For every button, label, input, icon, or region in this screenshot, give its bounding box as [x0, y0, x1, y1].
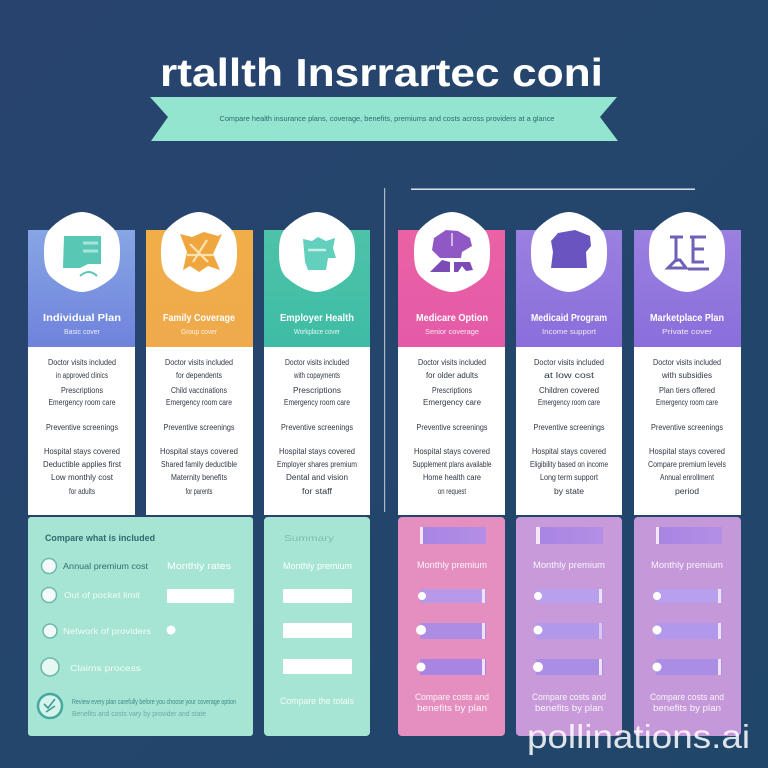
panel: mint comparison narrow [264, 517, 370, 736]
plan 1 details: in approved clinics [56, 371, 108, 380]
plan 5 details: Doctor visits included [534, 358, 604, 367]
plan 4 details: Emergency care [423, 398, 482, 407]
plan 2 details: Doctor visits included [165, 358, 233, 367]
plan 2 details [160, 358, 238, 496]
plan 5 details: Hospital stays covered [532, 447, 606, 456]
plan 1 subheading: Basic cover [64, 327, 100, 336]
panel: plan column 3 [264, 212, 370, 515]
plan 3 details: Prescriptions [293, 386, 341, 395]
plan 3 details: Doctor visits included [285, 358, 349, 367]
plan 6 details: Preventive screenings [651, 423, 723, 432]
row 1 [42, 558, 232, 574]
plan 2 heading: Family Coverage [163, 313, 235, 324]
plan 5 details: by state [554, 487, 585, 496]
plan 5 details: at low cost [544, 371, 595, 380]
plan 5 details: Eligibility based on income [530, 460, 608, 469]
footnote [415, 692, 489, 713]
plan 1 details: Prescriptions [61, 386, 103, 395]
footnote: benefits by plan [653, 703, 721, 713]
plan 4 details: Home health care [423, 473, 481, 482]
plan 4 details [412, 358, 492, 496]
bar 3 [533, 659, 603, 675]
plan 3 heading: Employer Health [280, 313, 354, 324]
plan 1 details: Emergency room care [48, 398, 116, 407]
plan 5 details: Preventive screenings [534, 423, 604, 432]
plan 6 details: Emergency room care [656, 398, 718, 407]
plan 1 heading: Individual Plan [43, 313, 121, 324]
bar 2 [652, 623, 722, 639]
plan 6 details: period [675, 487, 699, 496]
plan 1 details [43, 358, 122, 496]
bar 1 [534, 589, 603, 603]
plan 4 details: on request [438, 487, 467, 496]
plan 4 details: Hospital stays covered [414, 447, 490, 456]
footnote [650, 692, 724, 713]
horizontal rule [411, 188, 695, 190]
plan 6 details: Plan tiers offered [659, 386, 715, 395]
plan 3 subheading: Workplace cover [294, 327, 340, 336]
panel: plan column 5 [516, 212, 622, 515]
plan 1 details: Preventive screenings [46, 423, 118, 432]
bar 2 [416, 623, 486, 639]
plan 1 details: Hospital stays covered [44, 447, 120, 456]
narrow label: Monthly premium [283, 561, 352, 571]
panel: lilac comparison 1 [516, 517, 622, 736]
row 2 [42, 588, 234, 603]
bar 2 [283, 623, 352, 638]
plan 4 details: Prescriptions [432, 386, 472, 395]
icon: plan 2 badge [161, 212, 237, 292]
panel: lilac comparison 2 [634, 517, 741, 736]
plan 6 details: with subsidies [661, 371, 712, 380]
plan 2 details: for dependents [176, 371, 222, 380]
comparison heading: Compare what is included [45, 533, 155, 543]
label: Monthly premium [417, 560, 487, 570]
row 1: Monthly rates [167, 561, 232, 571]
icon: plan 3 badge [279, 212, 355, 292]
plan 4 details: Doctor visits included [418, 358, 486, 367]
plan 4 details: Preventive screenings [416, 423, 488, 432]
plan 1 details: Doctor visits included [48, 358, 116, 367]
icon: plan 5 badge [531, 212, 607, 292]
plan 5 details: Emergency room care [538, 398, 600, 407]
bar 1 [283, 589, 352, 603]
bar 3 [283, 659, 352, 674]
icon: check badge [38, 694, 62, 718]
plan 5 heading: Medicaid Program [531, 313, 607, 324]
plan 2 details: Emergency room care [166, 398, 232, 407]
footnote: Compare costs and [415, 692, 489, 702]
bar 3 [416, 659, 486, 675]
plan 3 details: for staff [302, 487, 333, 496]
plan 3 details: Employer shares premium [277, 460, 357, 469]
plan 6 details: Compare premium levels [648, 460, 726, 469]
plan 4 subheading: Senior coverage [425, 327, 479, 336]
bar 1 [418, 589, 486, 603]
plan 6 heading: Marketplace Plan [650, 313, 724, 324]
footnote [532, 692, 606, 713]
plan 5 details [530, 358, 608, 496]
plan 3 details: Emergency room care [284, 398, 350, 407]
row 3 [43, 624, 176, 638]
icon: plan 6 badge [649, 212, 725, 292]
plan 3 details: Hospital stays covered [279, 447, 355, 456]
plan 2 subheading: Group cover [181, 327, 217, 336]
plan 2 details: Maternity benefits [171, 473, 227, 482]
panel: plan column 4 [398, 212, 505, 515]
plan 3 details [277, 358, 357, 496]
footnote [72, 697, 236, 718]
plan 2 details: for parents [186, 487, 212, 496]
footnote: benefits by plan [417, 703, 487, 713]
top bar [656, 527, 722, 544]
plan 6 details [648, 358, 726, 496]
panel: pink comparison [398, 517, 505, 736]
vertical divider [384, 188, 385, 512]
bar 2 [534, 623, 603, 639]
footnote: Compare costs and [532, 692, 606, 702]
ribbon banner [150, 97, 618, 141]
panel: plan column 1 [28, 212, 135, 515]
plan 6 details: Doctor visits included [653, 358, 721, 367]
label: Monthly premium [651, 560, 723, 570]
plan 5 subheading: Income support [542, 327, 597, 336]
plan 6 subheading: Private cover [662, 327, 713, 336]
plan 2 details: Hospital stays covered [160, 447, 238, 456]
plan 1 details: Low monthly cost [51, 473, 114, 482]
row 4 [41, 658, 141, 676]
watermark: pollinations.ai [527, 718, 750, 755]
plan 1 details: Deductible applies first [43, 460, 122, 469]
plan 6 details: Hospital stays covered [649, 447, 725, 456]
plan 4 details: Supplement plans available [412, 460, 492, 469]
icon: plan 1 badge [44, 212, 120, 292]
bar 3 [652, 659, 722, 675]
plan 2 details: Child vaccinations [171, 386, 227, 395]
title: rtallth Insrrartec coni [160, 52, 603, 95]
panel: plan column 2 [146, 212, 253, 515]
footnote: Benefits and costs vary by provider and state [72, 709, 206, 718]
footnote: Review every plan carefully before you choose your coverage option [72, 697, 236, 706]
plan 3 details: with copayments [293, 371, 340, 380]
narrow footnote: Compare the totals [280, 696, 354, 706]
footnote: benefits by plan [535, 703, 603, 713]
narrow heading: Summary [284, 533, 335, 543]
plan 3 details: Dental and vision [286, 473, 348, 482]
plan 6 details: Annual enrollment [660, 473, 715, 482]
plan 4 heading: Medicare Option [416, 313, 488, 324]
bar 1 [653, 589, 722, 603]
plan 2 details: Shared family deductible [161, 460, 237, 469]
row 1: Annual premium cost [63, 561, 149, 571]
plan 3 details: Preventive screenings [281, 423, 353, 432]
row 3: Network of providers [63, 626, 151, 636]
label: Monthly premium [533, 560, 605, 570]
panel: plan column 6 [634, 212, 741, 515]
footnote: Compare costs and [650, 692, 724, 702]
plan 4 details: for older adults [426, 371, 478, 380]
row 2: Out of pocket limit [64, 590, 141, 600]
top bar [420, 527, 486, 544]
ribbon subtitle: Compare health insurance plans, coverage, benefits, premiums and costs across providers at a glance [220, 114, 554, 123]
plan 5 details: Children covered [539, 386, 599, 395]
top bar [536, 527, 603, 544]
plan 2 details: Preventive screenings [164, 423, 234, 432]
plan 5 details: Long term support [540, 473, 599, 482]
row 4: Claims process [70, 663, 141, 673]
panel: mint comparison wide [28, 517, 253, 736]
plan 1 details: for adults [69, 487, 95, 496]
icon: plan 4 badge [414, 212, 490, 292]
